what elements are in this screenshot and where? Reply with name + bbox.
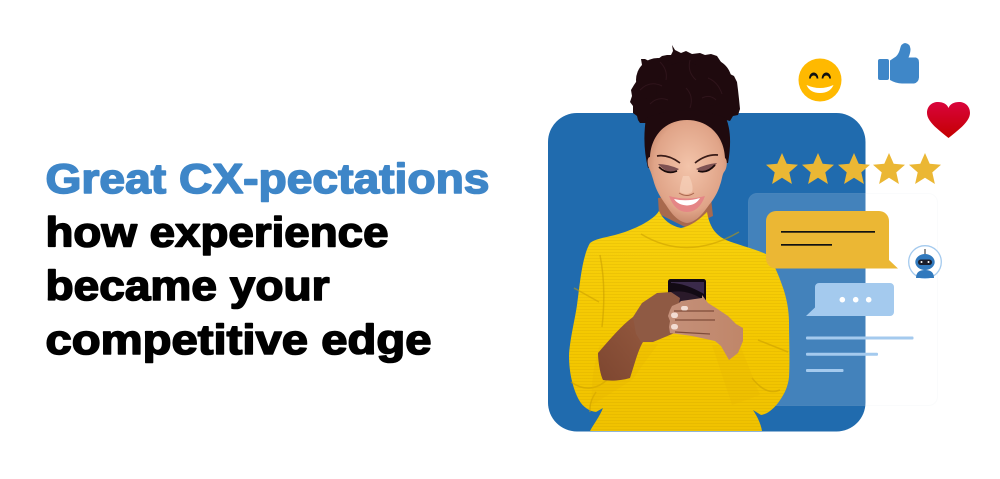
sweater shading (571, 232, 788, 412)
phone (668, 279, 706, 305)
title: how experience (46, 208, 388, 256)
title (46, 155, 490, 363)
icon: smiling emoji (798, 58, 842, 102)
hair strand texture (640, 60, 722, 108)
sweater (569, 211, 789, 431)
nose (680, 176, 693, 194)
rating stars (766, 153, 941, 184)
blue backdrop panel (548, 113, 866, 432)
neck (658, 194, 713, 228)
title: competitive edge (46, 316, 432, 363)
icon: thumbs up (878, 43, 919, 84)
text lines (806, 336, 914, 372)
left hand (633, 292, 680, 342)
speech bubble: blue with typing dots (806, 283, 894, 316)
woman (569, 45, 789, 431)
smile (669, 196, 705, 212)
left forearm (598, 317, 647, 381)
speech bubble: yellow (766, 211, 898, 268)
title: became your (46, 262, 330, 309)
hair bun (630, 45, 740, 168)
icon: chatbot avatar (909, 246, 941, 278)
eyes and brows (657, 155, 718, 172)
translucent chat panel (748, 193, 938, 406)
sweater knit texture (569, 211, 789, 431)
icon: heart (927, 102, 970, 138)
right hand and fingers (668, 295, 743, 360)
title: Great CX-pectations (46, 155, 490, 202)
face (648, 120, 727, 223)
